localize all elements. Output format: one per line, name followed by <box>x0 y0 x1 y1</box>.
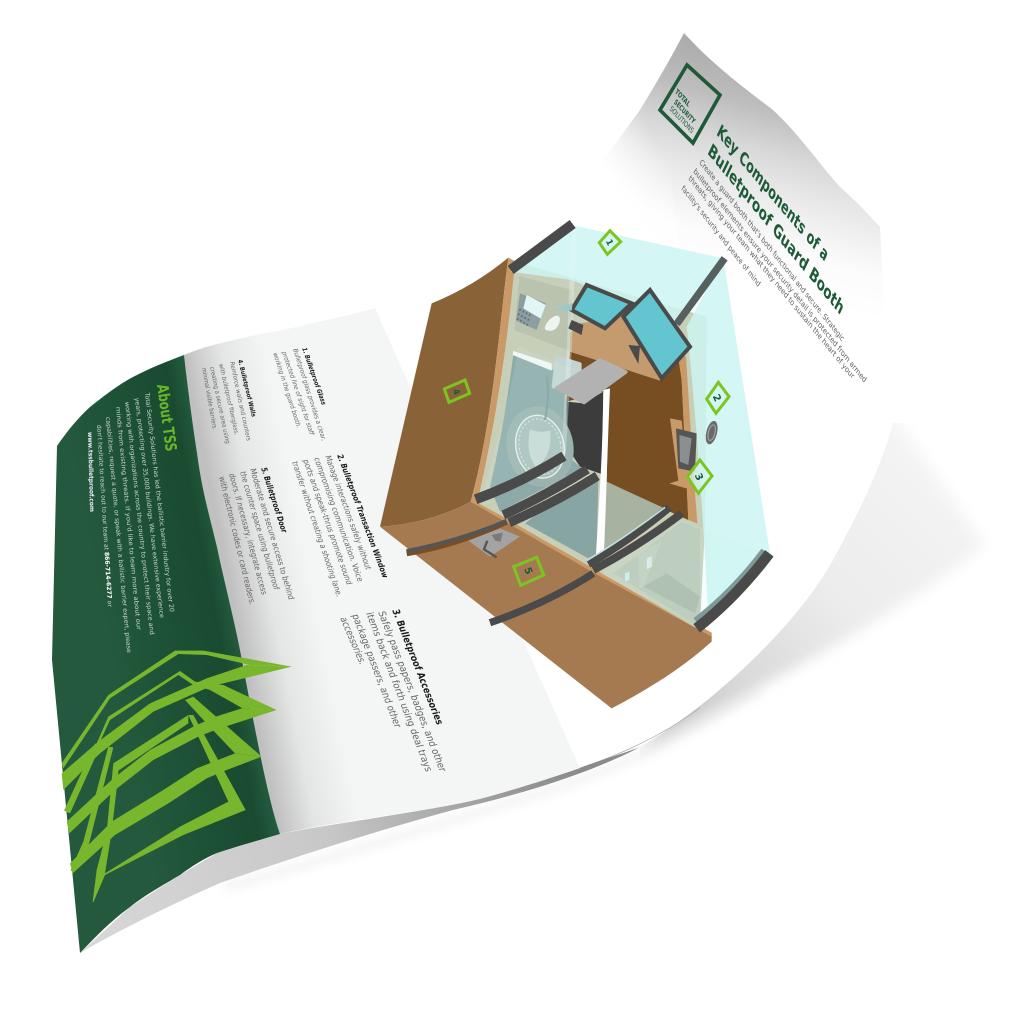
monitor screen two <box>623 290 690 378</box>
marker 4 <box>444 380 470 402</box>
text block: about TSS body: www.tssbulletproof.com <box>86 432 95 512</box>
logo: total security solutions: SECURITY <box>672 98 697 126</box>
page underside curl <box>80 747 640 953</box>
upper shelf wall <box>514 276 572 352</box>
text block: 4 bulletproof walls: 4. Bulletproof Walls <box>236 359 257 418</box>
glass bars <box>407 224 769 628</box>
text block: 5 bulletproof door: with electronic codes or card readers. <box>217 476 258 605</box>
text block: 1 bulletproof glass: Bulletproof glass provides a clear, <box>291 348 328 441</box>
title: Key Components of a <box>714 120 831 266</box>
window frame <box>669 418 697 488</box>
top fold shading <box>590 33 885 330</box>
mouse <box>545 316 560 331</box>
intro text block: bulletproof elements ensure your security detail is protected from armed <box>692 166 869 385</box>
text block: 4 bulletproof walls: creating a secure area using <box>208 366 231 444</box>
text block: 3 bulletproof accessories <box>337 608 448 773</box>
text block: 5 bulletproof door: 5. Bulletproof Door <box>259 467 290 533</box>
marker 2: 2 <box>710 393 723 404</box>
back wall <box>567 352 688 520</box>
text block: about TSS body: years, protecting over 35,000 buildings. We have extensive experience <box>133 397 165 618</box>
text block: 2 bulletproof transaction window: transfer without creating a shooting lane. <box>290 461 345 597</box>
text block: about TSS body: working with organizations across the country to protect their space and <box>123 401 155 635</box>
text block: 1 bulletproof glass: protected line of sight for staff <box>280 351 316 436</box>
right trim <box>677 352 697 523</box>
text block: 4 bulletproof walls: minimal visible barriers. <box>200 367 218 430</box>
floor left <box>525 477 598 558</box>
text block: 2 bulletproof transaction window: ports and speak-thrus promote sound <box>301 459 355 585</box>
text block: 3 bulletproof accessories: accessories. <box>337 616 368 666</box>
text block: about TSS body: capabilities, request a quote, or speak with a ballistic barrier expert, please <box>104 417 132 653</box>
text block: 5 bulletproof door: Moderate and secure access to behind <box>248 468 297 600</box>
text block: 1 bulletproof glass: working in the guard booth. <box>271 352 303 428</box>
white stripe <box>513 351 552 371</box>
glass: divider <box>562 225 577 455</box>
intro text block: Create a guard booth that's both functional and secure. Strategic <box>698 157 846 343</box>
page fold shadow <box>225 395 985 888</box>
text block: 3 bulletproof accessories: items back and forth using deal trays <box>363 611 434 773</box>
marker 3 <box>687 460 712 493</box>
text block: about TSS body <box>86 392 175 653</box>
logo: total security solutions: TOTAL <box>673 88 692 109</box>
speaker port <box>704 420 720 446</box>
text block: 3 bulletproof accessories: Safely pass papers, badges, and other <box>375 610 448 773</box>
phone <box>516 293 546 330</box>
text block: 2 bulletproof transaction window: compromising communication. Voice <box>312 457 366 582</box>
text block: about TSS body: Total Security Solutions has led the ballistic barrier industry for over 20 <box>143 392 175 612</box>
monitor stands <box>568 320 640 364</box>
lower left front panel <box>490 355 582 512</box>
text block: 3 bulletproof accessories: 3. Bulletproof Accessories <box>389 608 445 726</box>
text block: 4 bulletproof walls: with bulletproof fiberglass, <box>217 363 240 435</box>
marker 5 <box>514 557 544 585</box>
text block: 5 bulletproof door: doors. If necessary, integrate access <box>227 473 270 595</box>
text block: 5 bulletproof door: the counter space using bulletproof <box>238 471 282 591</box>
text block: 3 bulletproof accessories: package passers, and other <box>349 613 403 729</box>
logo: total security solutions: SOLUTIONS <box>668 105 695 136</box>
text block: about TSS body: minds from existing threats. If you'd like to learn more about our <box>114 406 142 631</box>
text block: 5 bulletproof door <box>217 467 297 605</box>
door opening <box>567 392 603 474</box>
panel: text page <box>184 308 580 834</box>
guard booth illustration <box>380 224 770 708</box>
monitor screen one <box>572 285 632 328</box>
upper shelf <box>570 317 662 381</box>
glass: left inner pane <box>480 347 568 503</box>
logo: total security solutions <box>660 65 720 143</box>
title: Bulletproof Guard Booth <box>705 139 847 319</box>
heading: about TSS: About TSS <box>153 383 181 453</box>
lower compartment <box>613 522 700 624</box>
glass: lower tint <box>600 520 708 625</box>
marker 3: 3 <box>692 472 705 483</box>
text block: 1 bulletproof glass: 1. Bulletproof Glass <box>300 347 328 405</box>
text block: 2 bulletproof transaction window: Manage interactions safely without <box>323 455 374 570</box>
door edge <box>596 388 610 554</box>
marker 2 <box>707 382 729 413</box>
intro text block: threats, giving your team what they need to sustain the heart of your <box>687 173 857 382</box>
corner trim <box>471 258 516 503</box>
interior frame <box>477 262 707 627</box>
text block: about TSS body: don't hesitate to reach out to our team at 866-714-6277 or <box>95 425 113 608</box>
glass: lower right pane <box>682 520 767 625</box>
counter trim <box>471 502 712 637</box>
text block: 2 bulletproof transaction window: 2. Bulletproof Transaction Window <box>335 454 391 579</box>
text block: 1 bulletproof glass <box>271 347 328 441</box>
pale dotted accent <box>553 303 573 311</box>
deal tray <box>557 360 626 403</box>
badge emblem <box>499 377 581 493</box>
panel: about TSS green column <box>52 355 280 953</box>
front counter <box>380 502 712 708</box>
text block: 4 bulletproof walls <box>200 359 257 444</box>
seat <box>553 357 580 388</box>
text block: 4 bulletproof walls: Reinforce walls and counters <box>228 361 252 441</box>
deal tray plate <box>468 528 520 557</box>
left wall <box>380 258 508 527</box>
marker 5: 5 <box>521 566 534 576</box>
marker 1: 1 <box>603 238 615 248</box>
intro text block: facility's security and peace of mind <box>680 183 762 289</box>
floor right <box>603 482 667 553</box>
green building outline graphic <box>62 651 292 902</box>
glass: right pane <box>687 258 770 625</box>
marker 1 <box>599 231 621 254</box>
marker 4: 4 <box>450 388 461 397</box>
text block: 2 bulletproof transaction window <box>290 454 391 597</box>
glass: top pane <box>511 225 723 323</box>
